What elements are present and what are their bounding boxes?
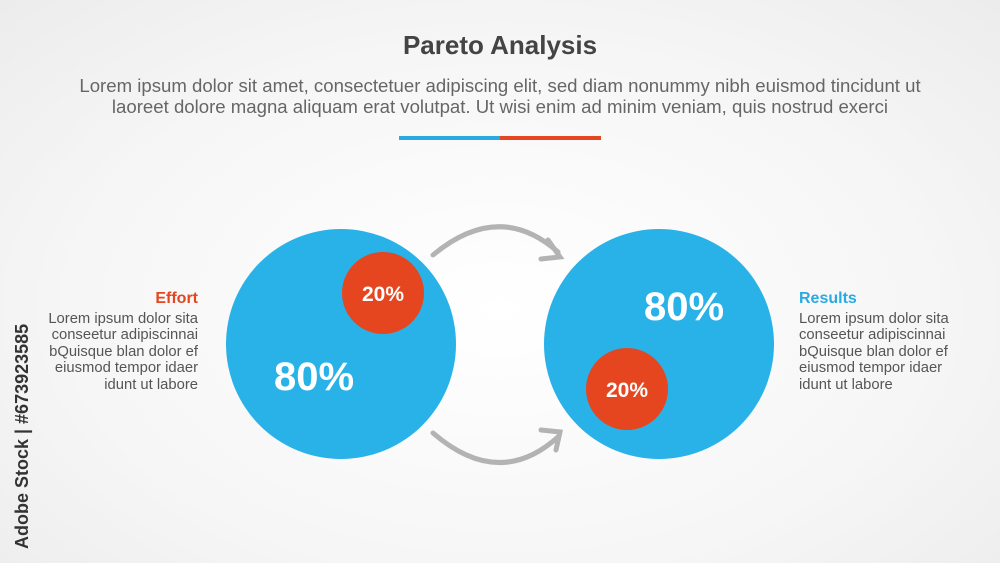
results text block: Lorem ipsum dolor sita <box>799 311 949 327</box>
title underline <box>399 136 601 140</box>
subtitle text <box>79 75 921 117</box>
side watermark text: Adobe Stock | #673923585 <box>12 324 32 549</box>
circle: results: 80% <box>644 285 724 329</box>
subtitle text: laoreet dolore magna aliquam erat volutpat. Ut wisi enim ad minim veniam, quis nostrud exerci <box>112 96 888 116</box>
effort text block: Effort <box>155 290 198 307</box>
circle: results <box>544 229 774 459</box>
results text block: eiusmod tempor idaer <box>799 360 942 376</box>
results text block: Results <box>799 290 857 307</box>
subtitle text: Lorem ipsum dolor sit amet, consectetuer adipiscing elit, sed diam nonummy nibh euismod tincidunt ut <box>79 75 921 96</box>
results text block <box>799 290 949 393</box>
effort text block: idunt ut labore <box>104 377 198 393</box>
results text block: conseetur adipiscinnai <box>799 327 945 343</box>
circle: results: 20% <box>606 379 648 402</box>
results text block: bQuisque blan dolor ef <box>799 344 948 360</box>
arrow: bottom <box>433 430 560 463</box>
circle: effort <box>226 229 456 459</box>
effort text block: Lorem ipsum dolor sita <box>48 311 198 327</box>
title: Pareto Analysis <box>403 30 597 60</box>
effort text block: bQuisque blan dolor ef <box>49 344 198 360</box>
circle: effort: 20% <box>362 283 404 306</box>
effort text block: conseetur adipiscinnai <box>52 327 198 343</box>
results text block: idunt ut labore <box>799 377 893 393</box>
effort text block <box>48 290 198 393</box>
arrow: top <box>433 227 560 259</box>
circle: effort: 80% <box>274 355 354 399</box>
effort text block: eiusmod tempor idaer <box>55 360 198 376</box>
